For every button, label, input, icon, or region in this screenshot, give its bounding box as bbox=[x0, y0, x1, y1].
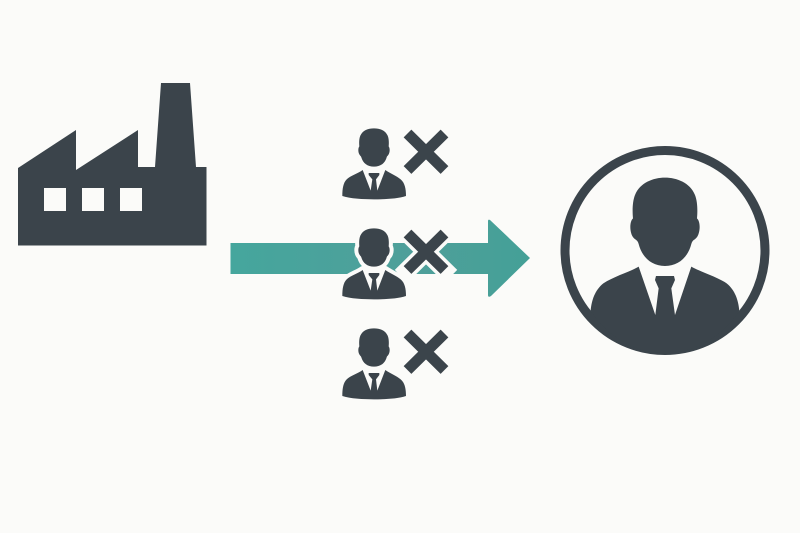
icon: cross bottom bbox=[408, 334, 444, 370]
icon: factory bbox=[18, 83, 206, 246]
icon: cross top bbox=[408, 134, 444, 170]
icon: middleman top bbox=[342, 128, 406, 199]
icon: middleman bottom bbox=[342, 328, 406, 399]
icon: middleman centre bbox=[342, 228, 406, 299]
icon: customer in circle bbox=[565, 150, 765, 353]
arrow bbox=[230, 220, 530, 297]
icon: cross centre bbox=[408, 234, 444, 270]
